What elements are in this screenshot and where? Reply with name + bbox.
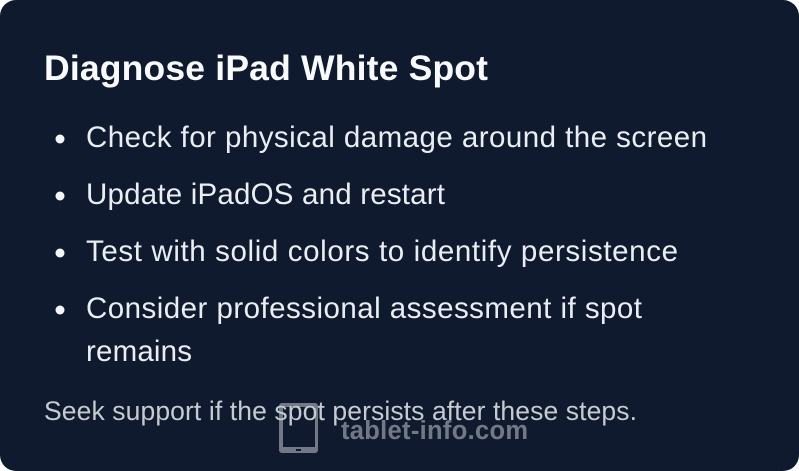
icon: tablet (279, 403, 318, 453)
heading: Diagnose iPad White Spot (44, 48, 488, 88)
watermark (279, 403, 528, 453)
list item 3: Test with solid colors to identify persistence (86, 235, 678, 268)
watermark text: tablet-info.com (341, 417, 528, 445)
footer note: Seek support if the spot persists after these steps. (44, 396, 637, 426)
list item 2: Update iPadOS and restart (86, 178, 445, 211)
list item 4: remains (86, 335, 192, 368)
list item 1: Check for physical damage around the screen (86, 121, 707, 154)
list item 4 (56, 292, 642, 368)
checklist (56, 121, 707, 368)
list item 4: Consider professional assessment if spot (86, 292, 642, 325)
